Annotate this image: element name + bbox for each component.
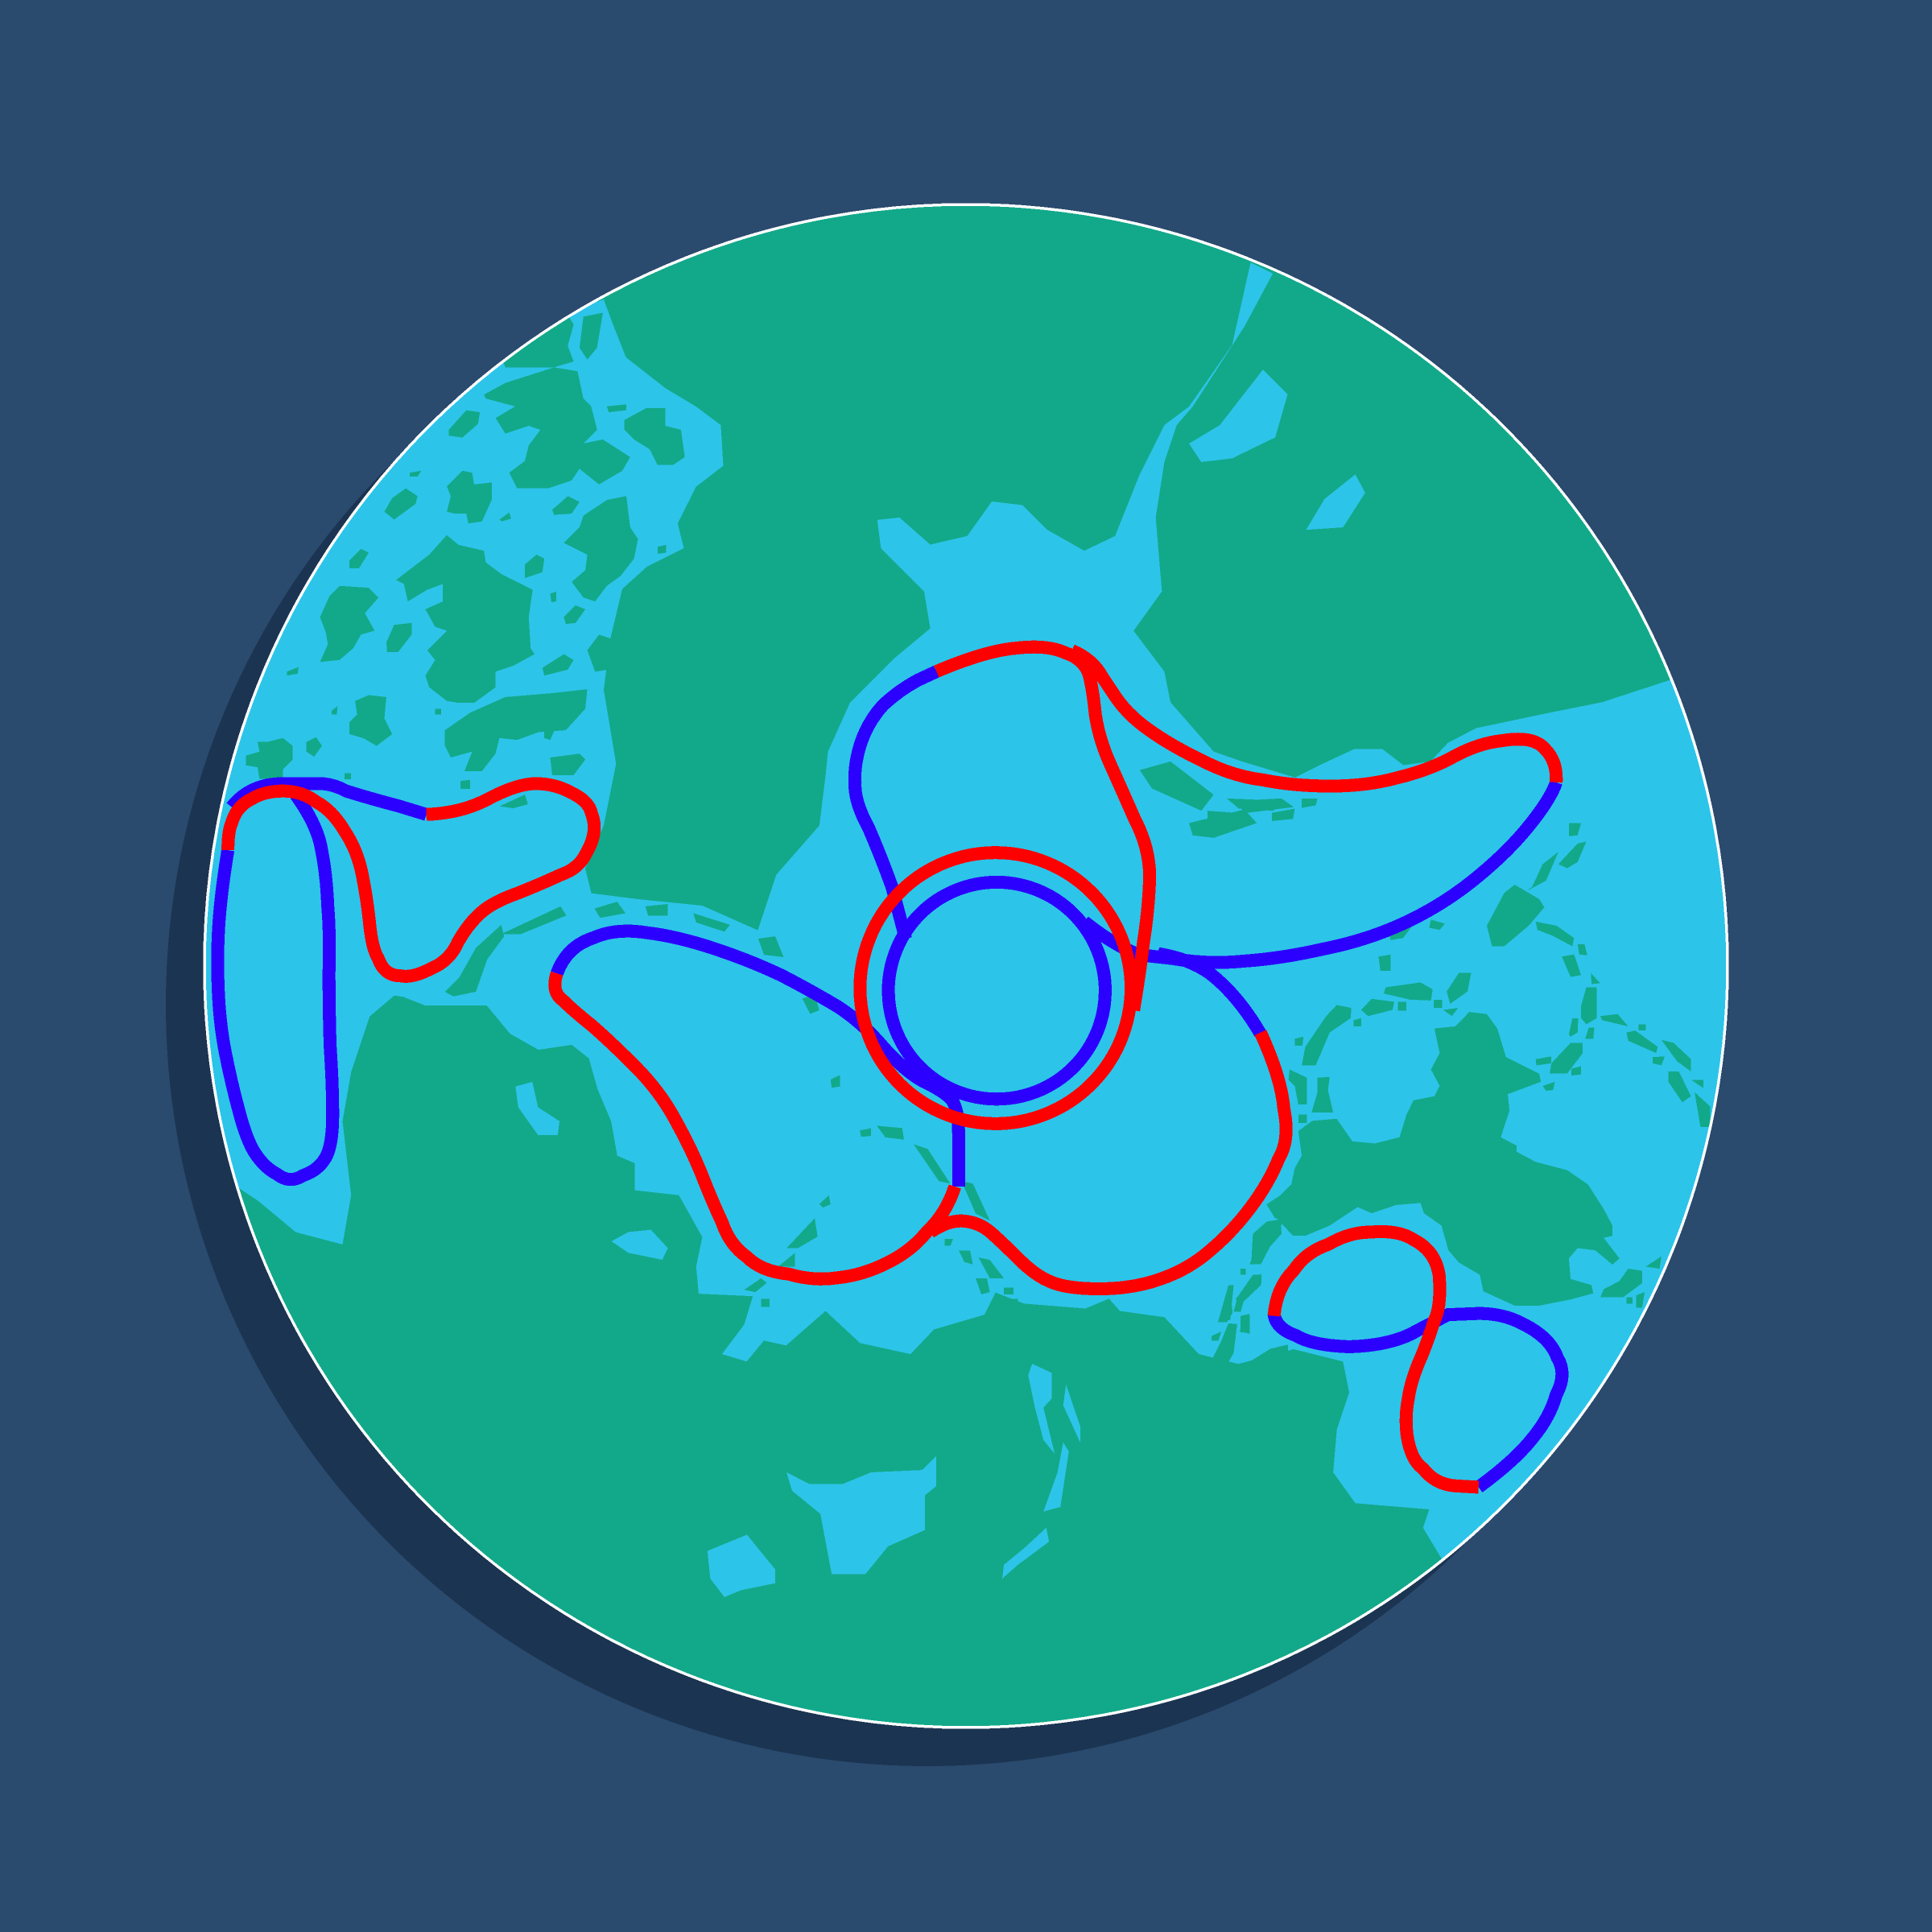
lakes: southern water bodies	[515, 1082, 1080, 1597]
blue contour: south-east lobe	[1158, 954, 1261, 1034]
red contour: south-east lobe	[931, 1033, 1286, 1289]
disc drop shadow	[166, 243, 1689, 1766]
islands: lens islands under the crescent	[1140, 762, 1294, 838]
disc outline	[204, 204, 1728, 1728]
land base	[239, 206, 1670, 1726]
red contour: crescent	[1072, 650, 1556, 786]
blue contour: figure eight	[1274, 1314, 1562, 1487]
blue contour: south-west lobe	[557, 931, 959, 1187]
islands: eastern land and archipelago	[1208, 799, 1711, 1368]
lakes: isolated water bodies	[1189, 369, 1365, 530]
blue contour: crescent underside	[1084, 782, 1556, 963]
red contour: western lobes	[228, 783, 594, 976]
red contour: figure eight	[1274, 1232, 1479, 1487]
ocean: main water body	[206, 262, 1726, 1558]
islands: central channel chain	[445, 902, 1288, 1340]
blue contour: western lobes	[217, 783, 427, 1179]
polar map infographic	[166, 203, 1729, 1766]
contours	[217, 647, 1562, 1487]
red contour: central ring	[860, 852, 1131, 1124]
map disc	[206, 206, 1726, 1726]
blue contour: northern lobe	[855, 671, 936, 939]
blue contour: central ring	[889, 882, 1105, 1099]
islands: north-west archipelago	[246, 312, 685, 808]
red contour: northern lobe	[936, 647, 1150, 1010]
red contour: south-west lobe	[555, 973, 955, 1279]
